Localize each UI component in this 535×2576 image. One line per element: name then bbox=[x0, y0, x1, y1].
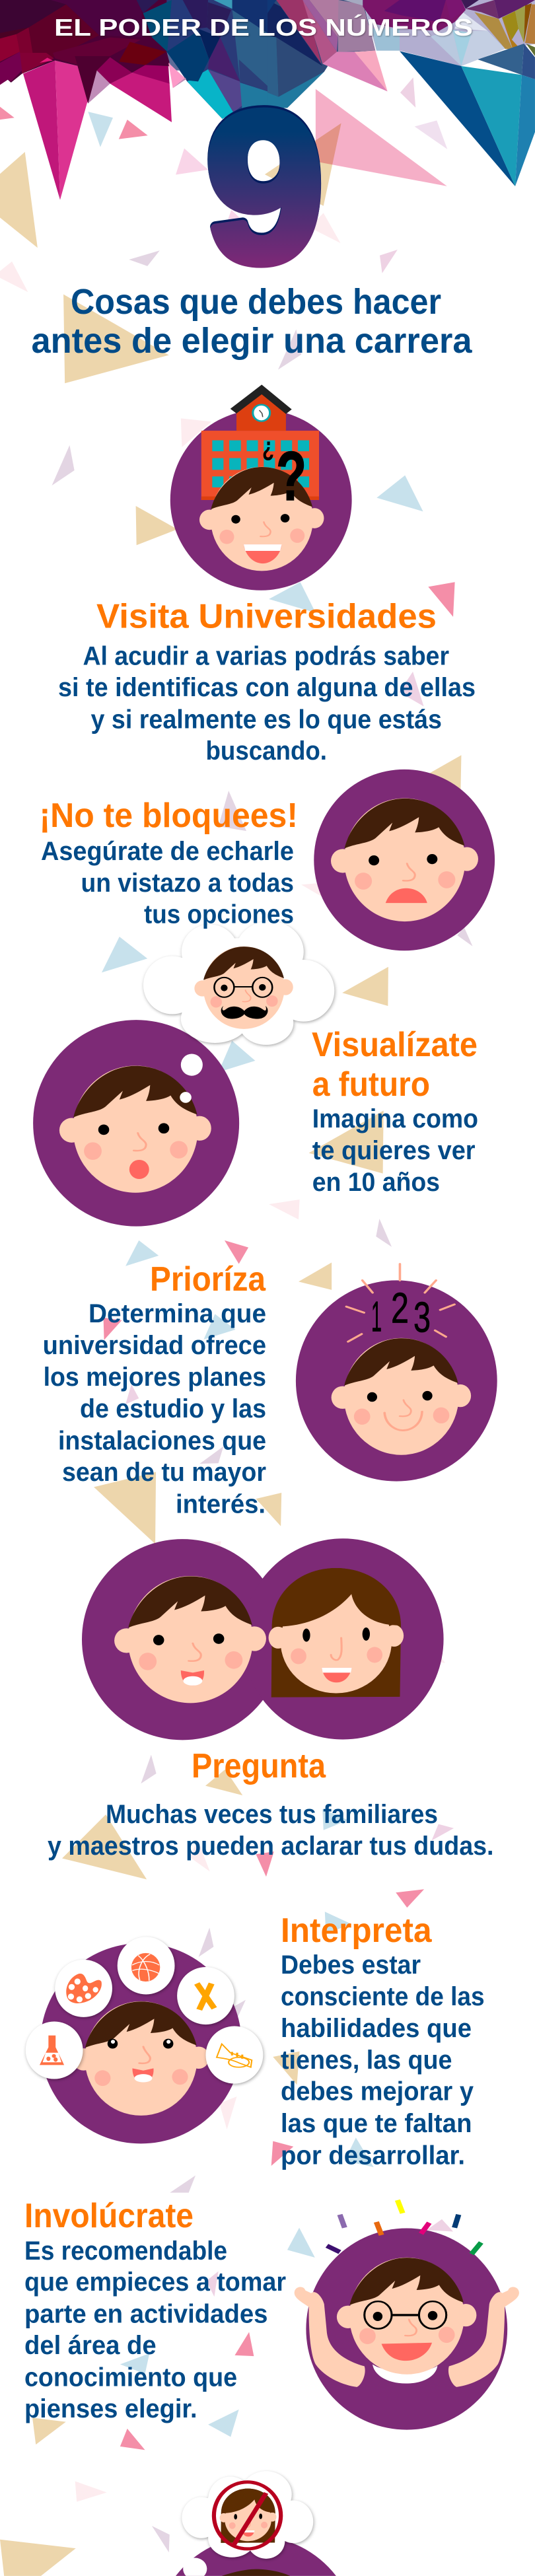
section: Interpreta: Interpreta bbox=[281, 1912, 433, 1950]
section: Priorízá: de estudio y las bbox=[80, 1394, 266, 1423]
section: Visita Universidades: buscando. bbox=[206, 736, 327, 766]
section: Visualízate a futuro: a futuro bbox=[312, 1065, 430, 1104]
icon: school building bbox=[201, 384, 319, 500]
section: Involúcrate: que empieces a tomar bbox=[24, 2268, 286, 2297]
talent bubble: palette bbox=[55, 1960, 112, 2017]
section: Priorízá: instalaciones que bbox=[58, 1427, 266, 1456]
talent bubble: flask bbox=[26, 2022, 83, 2079]
section: Interpreta: por desarrollar. bbox=[281, 2141, 465, 2170]
talent bubble: basketball bbox=[118, 1937, 174, 1994]
character: boy thinking, partly cropped bbox=[176, 2536, 336, 2576]
section: Interpreta: Debes estar bbox=[281, 1950, 421, 1980]
character: boy and girl talking bbox=[82, 1538, 444, 1740]
section: Pregunta: Muchas veces tus familiares bbox=[106, 1800, 438, 1829]
section: Involúcrate: conocimiento que bbox=[24, 2363, 237, 2392]
section: Involúcrate bbox=[24, 2197, 286, 2423]
main title: antes de elegir una carrera bbox=[32, 321, 472, 361]
section: Involúcrate: Involúcrate bbox=[24, 2197, 194, 2235]
talent bubble: pencils bbox=[177, 1967, 234, 2024]
section: Interpreta: las que te faltan bbox=[281, 2109, 472, 2138]
icon: numbers 123 bbox=[371, 1284, 431, 1341]
section: Visita Universidades: si te identificas con alguna de ellas bbox=[58, 673, 476, 702]
section: Visualízate a futuro bbox=[312, 1026, 478, 1197]
section: Interpreta: debes mejorar y bbox=[281, 2077, 474, 2106]
big number 9: 9 bbox=[205, 67, 324, 304]
section: Visualízate a futuro: Imagina como bbox=[312, 1104, 478, 1133]
icon: question marks: ¿ bbox=[262, 431, 274, 462]
section: No te bloquees: un vistazo a todas bbox=[81, 869, 294, 898]
confetti bbox=[327, 2200, 481, 2254]
character: smiling boy with 123 bbox=[296, 1264, 497, 1482]
main title bbox=[32, 282, 472, 361]
icon: numbers 123: 1 bbox=[371, 1292, 382, 1341]
character: surprised boy bbox=[33, 1020, 239, 1227]
section: Priorízá: los mejores planes bbox=[44, 1363, 266, 1392]
section: Involúcrate: del área de bbox=[24, 2331, 157, 2360]
section: Visualízate a futuro: en 10 años bbox=[312, 1168, 440, 1197]
section: Involúcrate: Es recomendable bbox=[24, 2236, 227, 2266]
icon: numbers 123: 2 bbox=[391, 1284, 409, 1332]
section: Visita Universidades: Visita Universidades bbox=[96, 597, 437, 635]
section: Pregunta bbox=[48, 1747, 494, 1861]
big number 9: 9 bbox=[205, 69, 324, 306]
section: Priorízá: Prioríza bbox=[150, 1260, 266, 1299]
talent bubble: trumpet bbox=[206, 2026, 263, 2084]
section: Pregunta: y maestros pueden aclarar tus dudas. bbox=[48, 1832, 494, 1861]
thought cloud: future self with glasses and moustache bbox=[143, 921, 334, 1045]
section: No te bloquees bbox=[40, 797, 298, 929]
section: No te bloquees: Asegúrate de echarle bbox=[41, 837, 294, 866]
section: Involúcrate: pienses elegir. bbox=[24, 2394, 197, 2423]
section: Visita Universidades: y si realmente es lo que estás bbox=[91, 705, 442, 734]
section: Visualízate a futuro: te quieres ver bbox=[312, 1136, 476, 1165]
section: Priorízá: universidad ofrece bbox=[43, 1331, 266, 1360]
header title: EL PODER DE LOS NÚMEROS bbox=[54, 13, 473, 41]
header crystals bbox=[0, 0, 535, 200]
section: Interpreta bbox=[281, 1912, 485, 2170]
section: Visita Universidades: Al acudir a varias podrás saber bbox=[83, 642, 449, 671]
character: sad boy bbox=[314, 769, 495, 950]
section: Interpreta: tienes, las que bbox=[281, 2046, 452, 2075]
section: Interpreta: consciente de las bbox=[281, 1982, 485, 2011]
icon: question marks bbox=[262, 431, 306, 515]
section: Interpreta: habilidades que bbox=[281, 2014, 472, 2043]
character: boy with raised arms and confetti bbox=[295, 2200, 519, 2430]
section: Priorízá: sean de tu mayor bbox=[62, 1458, 266, 1487]
section: Visualízate a futuro: Visualízate bbox=[312, 1026, 478, 1064]
section: Priorízá: Determina que bbox=[89, 1299, 266, 1328]
thought cloud: crossed-out girl bbox=[182, 2471, 313, 2576]
section: No te bloquees: tus opciones bbox=[144, 900, 294, 929]
character: boy with talents bbox=[26, 1937, 263, 2143]
main title: Cosas que debes hacer bbox=[71, 282, 441, 322]
section: No te bloquees: ¡No te bloquees! bbox=[40, 797, 298, 835]
section: Priorízá: interés. bbox=[176, 1490, 266, 1519]
icon: question marks: ? bbox=[276, 438, 306, 515]
icon: numbers 123: 3 bbox=[413, 1293, 431, 1341]
section: Visita Universidades bbox=[58, 597, 476, 766]
section: Involúcrate: parte en actividades bbox=[24, 2300, 268, 2329]
character: boy visiting university bbox=[170, 384, 352, 590]
section: Priorízá bbox=[43, 1260, 266, 1519]
section: Pregunta: Pregunta bbox=[192, 1747, 326, 1785]
